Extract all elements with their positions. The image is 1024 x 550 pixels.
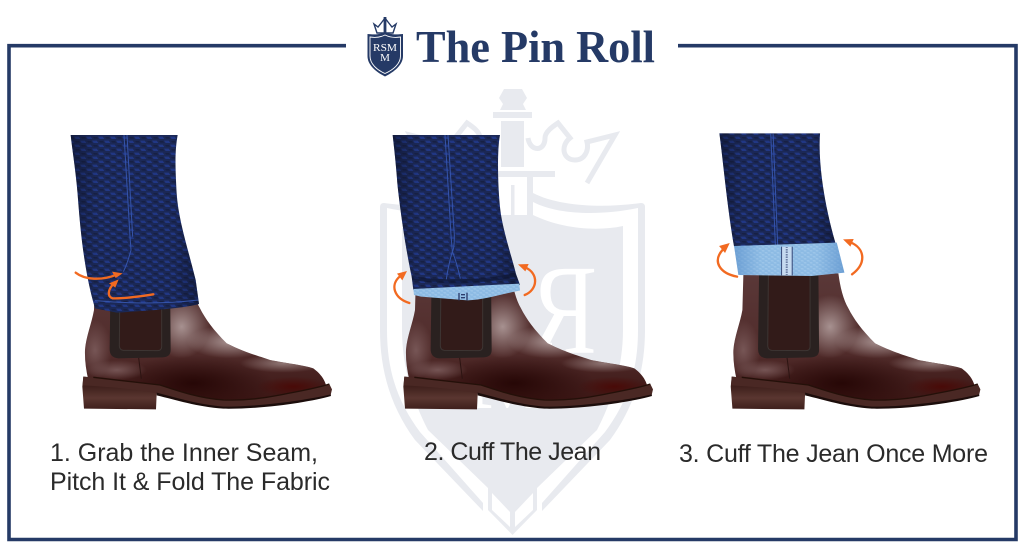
title: The Pin Roll xyxy=(416,22,655,72)
arrows: roll up again xyxy=(718,239,862,277)
logo: RSM crest: M xyxy=(380,52,390,64)
light cuff xyxy=(734,243,844,276)
watermark monogram xyxy=(466,240,597,430)
arrows: roll up xyxy=(394,264,535,303)
watermark monogram: R xyxy=(528,240,597,382)
caption 3: 3. Cuff The Jean Once More xyxy=(679,440,988,468)
arrows: fold inward xyxy=(76,272,153,298)
caption 1: 1. Grab the Inner Seam, xyxy=(50,439,318,467)
logo: RSM crest xyxy=(368,17,403,76)
caption 1: Pitch It & Fold The Fabric xyxy=(50,468,330,496)
logo: RSM crest: RSM xyxy=(373,42,397,54)
jean leg xyxy=(71,135,199,313)
caption 2: 2. Cuff The Jean xyxy=(424,438,601,466)
light cuff edge xyxy=(413,284,520,300)
jean leg with cuff xyxy=(393,135,520,300)
watermark tip cut-outs xyxy=(492,493,533,527)
jean leg with wide cuff xyxy=(719,133,844,276)
step 3: boot with second cuff xyxy=(718,133,980,412)
watermark: shield crest xyxy=(380,89,645,535)
watermark monogram: M xyxy=(466,319,555,430)
step 2: boot with first cuff xyxy=(393,135,653,412)
step 1: boot with grabbed inner seam xyxy=(71,135,332,412)
